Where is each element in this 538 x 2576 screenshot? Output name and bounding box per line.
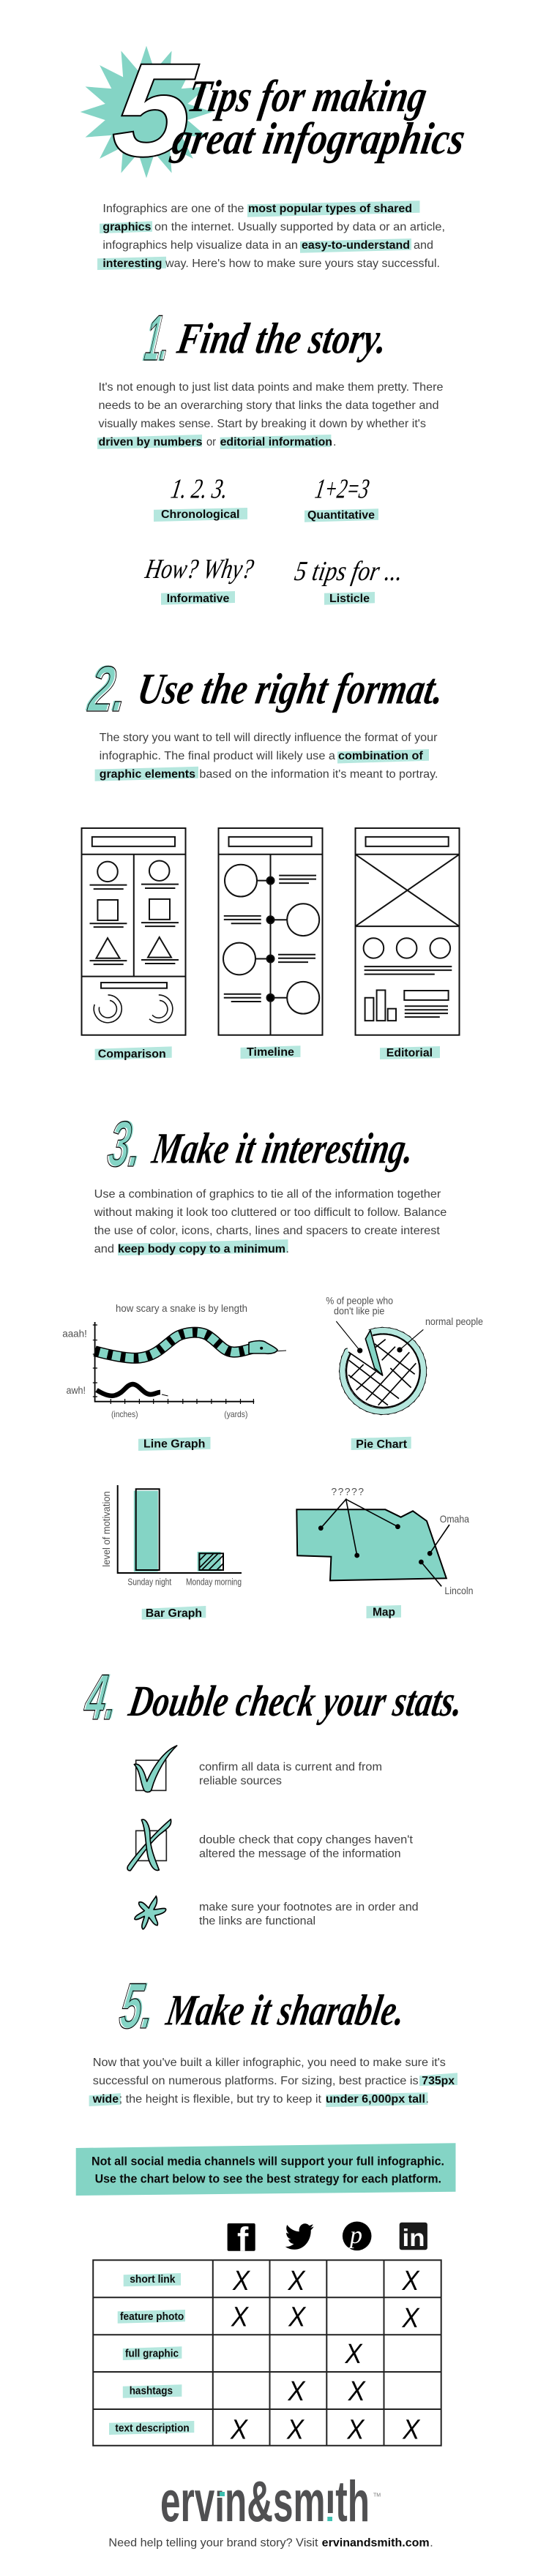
text block: intro: on the internet. Usually supported by data or an article, [154, 221, 445, 233]
chart: pie: % of people who [326, 1296, 393, 1307]
story type: informative: Informative [167, 593, 229, 605]
story type: informative [143, 554, 256, 605]
story type: listicle: 5 tips for ... [292, 556, 406, 587]
text block: intro: interesting [102, 258, 162, 270]
heading number 1: 1. [141, 301, 175, 374]
row: text description: X [286, 2414, 305, 2445]
label: comparison: Comparison [98, 1048, 166, 1061]
wireframe: timeline [218, 828, 322, 1035]
heading number 2: 2. [85, 653, 132, 725]
row: feature photo [118, 2302, 420, 2334]
section 4: double check your stats [81, 1660, 467, 1929]
text block: intro: infographics help visualize data in an [102, 239, 298, 252]
row: feature photo: feature photo [120, 2311, 184, 2323]
story type: chronological: Chronological [161, 508, 240, 521]
text block: section 1 body: It's not enough to just list data points and make them pretty. There [98, 381, 444, 394]
checklist item 3 [199, 1901, 419, 1928]
heading number 4: 4. [81, 1661, 122, 1733]
heading: find the story: Find the story. [173, 315, 391, 364]
logo: ervin and smith [160, 2468, 381, 2534]
title block [81, 35, 469, 184]
label: editorial: Editorial [386, 1047, 433, 1059]
icon: small snake [97, 1384, 168, 1396]
heading number 1 [140, 301, 175, 375]
label: pie chart: Pie Chart [356, 1438, 408, 1451]
story type: chronological: 1. 2. 3. [168, 474, 231, 505]
row: hashtags: X [348, 2376, 366, 2407]
icon: check box [134, 1746, 177, 1792]
footer call to action: . [430, 2537, 433, 2550]
pie lattice [348, 1340, 416, 1405]
icon: asterisk [135, 1896, 166, 1929]
heading number 5: 5. [117, 1969, 160, 2041]
chart: bar graph [100, 1485, 242, 1588]
row: short link: X [288, 2266, 306, 2297]
chart: pie: normal people [425, 1316, 483, 1327]
title line 2: great infographics [168, 113, 469, 164]
row: text description: X [230, 2414, 248, 2445]
story type: quantitative: Quantitative [307, 509, 375, 522]
text block: section 1 body [97, 381, 444, 449]
row: hashtags: hashtags [130, 2386, 173, 2397]
icon: facebook [228, 2220, 255, 2258]
checklist item 2 [199, 1833, 414, 1860]
callout: Use the chart below to see the best strategy for each platform. [95, 2171, 441, 2185]
chart: bar graph: Monday morning [186, 1577, 242, 1588]
icon: linkedin: in [403, 2224, 425, 2251]
section 5: make it sharable [76, 1969, 457, 2446]
text block: section 5 body: 735px [422, 2075, 455, 2087]
heading number 3 [104, 1107, 147, 1180]
chart: map: ????? [331, 1485, 364, 1497]
text block: section 1 body: . [333, 436, 336, 448]
heading: use the right format: Use the right format. [134, 665, 448, 713]
section 3: make it interesting [62, 1107, 483, 1620]
text block: section 5 body: . [426, 2093, 429, 2106]
text block: section 2 body: based on the information it's meant to portray. [199, 768, 438, 781]
section 1: find the story [97, 301, 444, 605]
heading number 1: 1. [141, 301, 175, 374]
chart: pie [326, 1296, 483, 1411]
text block: section 1 body: editorial information [220, 436, 332, 448]
chart: line graph of snakes: aaah! [62, 1327, 87, 1339]
text block: section 2 body [95, 732, 438, 781]
text block: section 1 body: driven by numbers [98, 436, 203, 448]
icon: pinterest [343, 2221, 372, 2250]
story type: quantitative [305, 474, 378, 522]
chart: line graph of snakes: (inches) [111, 1409, 138, 1419]
chart: map [296, 1485, 473, 1596]
text block: section 2 body: combination of [338, 750, 423, 762]
text block: section 3 body: . [285, 1243, 289, 1255]
icon: twitter [285, 2223, 314, 2250]
heading: make it sharable: Make it sharable. [162, 1986, 409, 2035]
wireframe: comparison [82, 828, 186, 1035]
row: short link: short link [130, 2274, 176, 2286]
heading number 3: 3. [104, 1108, 146, 1180]
label: timeline: Timeline [247, 1046, 294, 1059]
icons: check, x and asterisk [127, 1746, 177, 1929]
footer call to action: ervinandsmith.com [322, 2537, 430, 2550]
checklist item 3: the links are functional [199, 1915, 315, 1928]
text block: intro: easy-to-understand [302, 239, 410, 252]
chart: line graph of snakes: awh! [66, 1384, 86, 1396]
platform chart table [93, 2260, 441, 2446]
heading number 5: 5. [116, 1969, 159, 2042]
heading number 2: 2. [85, 653, 132, 725]
title line 1: Tips for making [184, 70, 431, 121]
row: feature photo: X [288, 2302, 307, 2332]
text block: section 3 body: without making it look too cluttered or too difficult to follow. Balance [94, 1206, 447, 1219]
icon: large snake [95, 1332, 286, 1358]
logo: ervin and smith: TM [373, 2493, 381, 2498]
row: full graphic: full graphic [125, 2348, 179, 2360]
text block: section 5 body: successful on numerous platforms. For sizing, best practice is [93, 2075, 419, 2087]
text block: intro: way. Here's how to make sure yours stay successful. [165, 258, 440, 270]
heading number 5: 5. [116, 1969, 159, 2042]
logo: ervin and smith: ervin&smith [160, 2468, 370, 2534]
row: feature photo: X [231, 2302, 249, 2332]
row: hashtags [123, 2376, 366, 2407]
row: full graphic: X [345, 2339, 363, 2370]
checklist item 2: double check that copy changes haven't [199, 1833, 414, 1846]
heading number 2: 2. [83, 652, 130, 724]
label: line graph: Line Graph [143, 1438, 205, 1450]
pie crust [343, 1331, 424, 1411]
heading: make it interesting: Make it interesting. [149, 1124, 418, 1173]
heading number 4: 4. [82, 1660, 123, 1732]
icon: teal starburst [81, 46, 212, 178]
chart title: how scary a snake is by length [116, 1302, 247, 1314]
text block: intro: Infographics are one of the [102, 203, 244, 215]
story type: quantitative: 1+2=3 [313, 474, 372, 505]
row: text description: X [346, 2414, 365, 2445]
icon: pinterest: p [348, 2222, 362, 2249]
chart: line graph of snakes [62, 1302, 286, 1419]
text block: section 3 body: keep body copy to a minimum [118, 1243, 285, 1255]
story type: listicle: Listicle [329, 593, 370, 605]
large numeral 5: 5 [107, 35, 203, 184]
callout: Not all social media channels will support your full infographic. [91, 2154, 444, 2168]
text block: section 3 body: and [94, 1243, 114, 1255]
text block: section 5 body: under 6,000px tall [326, 2093, 425, 2106]
text block: section 5 body: wide [92, 2093, 119, 2106]
story type: chronological [154, 474, 247, 522]
row: text description: X [402, 2414, 421, 2445]
checklist item 3: make sure your footnotes are in order and [199, 1901, 419, 1914]
row: short link: X [232, 2266, 250, 2297]
text block: section 5 body: Now that you've built a killer infographic, you need to make sure it's [93, 2057, 446, 2069]
row: short link: X [402, 2266, 420, 2297]
text block: section 3 body [94, 1188, 447, 1255]
pie slice cut [346, 1332, 383, 1375]
text block: section 2 body: graphic elements [100, 768, 195, 781]
checklist item 1: reliable sources [199, 1775, 282, 1787]
row: short link [124, 2266, 420, 2297]
wireframe: editorial [356, 828, 460, 1035]
text block: section 1 body: or [206, 436, 217, 448]
row: full graphic [123, 2339, 363, 2370]
checklist item 2: altered the message of the information [199, 1847, 401, 1860]
text block: intro [97, 200, 445, 270]
story type: informative: How? Why? [143, 554, 256, 585]
heading number 4: 4. [81, 1661, 122, 1733]
chart: pie: don't like pie [334, 1306, 384, 1317]
row: hashtags: X [288, 2376, 306, 2407]
text block: intro: graphics [102, 221, 152, 233]
icon: facebook: f [237, 2220, 249, 2258]
label: map [366, 1605, 401, 1619]
checklist item 1: confirm all data is current and from [199, 1761, 382, 1773]
text block: section 2 body: The story you want to tell will directly influence the format of your [100, 732, 438, 744]
label: map: Map [373, 1607, 395, 1619]
heading number 3: 3. [105, 1107, 147, 1179]
text block: section 5 body [89, 2057, 457, 2107]
chart: map: Lincoln [444, 1585, 473, 1596]
heading number 3: 3. [104, 1108, 146, 1180]
footer call to action [108, 2537, 433, 2550]
icon: x box [127, 1820, 171, 1871]
row: text description [109, 2414, 421, 2445]
heading number 5 [116, 1969, 160, 2042]
story type: listicle [292, 556, 406, 605]
chart: bar graph: Sunday night [127, 1577, 172, 1588]
footer call to action: Need help telling your brand story? Visit [108, 2537, 318, 2550]
checklist item 1 [199, 1761, 382, 1787]
text block: section 3 body: Use a combination of graphics to tie all of the information together [94, 1188, 441, 1201]
text block: intro: most popular types of shared [248, 203, 412, 215]
section 2: use the right format [82, 652, 460, 1061]
chart: map: Omaha [440, 1513, 469, 1525]
text block: intro: and [414, 239, 433, 252]
chart: bar graph: level of motivation [100, 1491, 112, 1567]
heading number 4 [81, 1660, 123, 1733]
row: text description: text description [115, 2422, 190, 2434]
text block: section 1 body: visually makes sense. Start by breaking it down by whether it's [98, 418, 426, 430]
chart: line graph of snakes: (yards) [224, 1409, 247, 1419]
text block: section 5 body: ; the height is flexible, but try to keep it [119, 2093, 322, 2106]
callout [76, 2143, 455, 2196]
heading number 1: 1. [140, 302, 173, 375]
label: bar graph: Bar Graph [146, 1607, 202, 1620]
text block: section 1 body: needs to be an overarching story that links the data together and [98, 399, 439, 412]
text block: section 2 body: infographic. The final product will likely use a [100, 750, 335, 762]
row: feature photo: X [402, 2303, 420, 2334]
text block: section 3 body: the use of color, icons, charts, lines and spacers to create interest [94, 1225, 440, 1237]
